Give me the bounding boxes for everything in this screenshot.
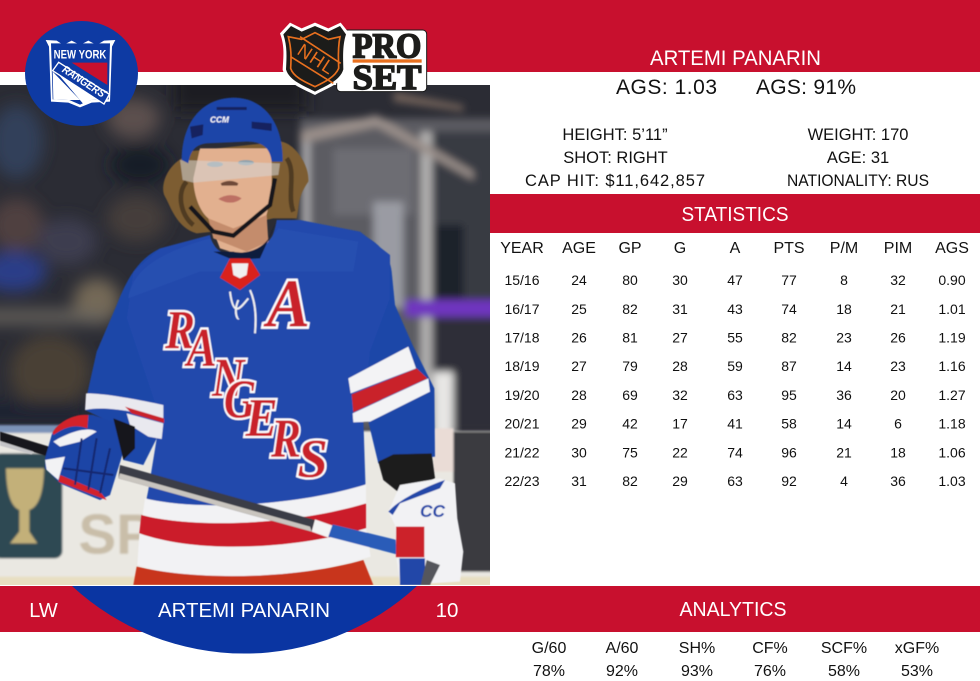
- top red banner: [0, 0, 980, 72]
- table rows: 58: [781, 416, 797, 432]
- pro set wordmark: PRO: [353, 26, 421, 65]
- table rows: 1.18: [938, 416, 966, 432]
- table rows: 42: [622, 416, 638, 432]
- ags summary: [616, 76, 856, 99]
- player bio details: NATIONALITY: RUS: [787, 172, 929, 190]
- table rows: 26: [571, 330, 587, 346]
- table header: P/M: [830, 240, 858, 257]
- table rows: 1.06: [938, 444, 966, 460]
- player bio details: [525, 126, 929, 190]
- pro set logo: [280, 23, 427, 97]
- table rows: 81: [622, 330, 638, 346]
- ice and boards: [0, 424, 490, 585]
- table rows: 24: [571, 272, 587, 288]
- jersey number: 10: [436, 599, 458, 622]
- table rows: 55: [727, 330, 743, 346]
- player bio details: AGE: 31: [827, 149, 889, 167]
- jersey torso: [127, 220, 390, 515]
- helmet: [182, 98, 283, 163]
- player bio details: SHOT: RIGHT: [563, 149, 668, 167]
- analytics table: G/60: [532, 640, 566, 657]
- team logo: [25, 21, 138, 126]
- visor and chin strap: [180, 160, 280, 183]
- sleeve stripes: [348, 347, 416, 393]
- table rows: 1.01: [938, 301, 966, 317]
- right sleeve: [333, 232, 435, 463]
- neck and face: [193, 148, 272, 257]
- table rows: 18/19: [504, 358, 540, 374]
- player figure: CCM: [210, 115, 230, 125]
- alternate captain letter: A: [263, 267, 310, 342]
- table rows: 19/20: [504, 387, 540, 403]
- jersey wordmark: N: [211, 347, 246, 408]
- player bio details: HEIGHT: 5’11”: [562, 126, 668, 144]
- table rows: 22/23: [504, 473, 540, 489]
- table rows: 59: [727, 358, 743, 374]
- table rows: 74: [727, 444, 743, 460]
- table rows: 79: [622, 358, 638, 374]
- ice and boards: SP: [78, 503, 154, 566]
- table header: G: [674, 240, 686, 257]
- table rows: 8: [840, 272, 848, 288]
- table rows: 18: [836, 301, 852, 317]
- table rows: 47: [727, 272, 743, 288]
- analytics table: 53%: [901, 663, 933, 680]
- rangers shield: [46, 40, 115, 107]
- table rows: 31: [672, 301, 688, 317]
- table rows: 1.03: [938, 473, 966, 489]
- logo plate: [337, 30, 427, 92]
- player photo: [0, 85, 490, 585]
- table header: PIM: [884, 240, 912, 257]
- table rows: 1.16: [938, 358, 966, 374]
- table rows: 20/21: [504, 416, 540, 432]
- analytics table: xGF%: [895, 640, 939, 657]
- table rows: 77: [781, 272, 797, 288]
- jersey wordmark: S: [297, 428, 328, 489]
- table rows: 96: [781, 444, 797, 460]
- table rows: 0.90: [938, 272, 966, 288]
- jersey wordmark: R: [270, 408, 301, 469]
- bottom red band: [0, 586, 980, 632]
- table rows: 15/16: [504, 272, 540, 288]
- left glove: [45, 415, 135, 500]
- table rows: 82: [781, 330, 797, 346]
- table header: PTS: [773, 240, 805, 257]
- table rows: 30: [571, 444, 587, 460]
- nhl shield: [280, 23, 349, 95]
- table rows: 32: [890, 272, 906, 288]
- table rows: 6: [894, 416, 902, 432]
- photo background: arena crowd and ice: [0, 85, 490, 585]
- table rows: 69: [622, 387, 638, 403]
- table rows: 92: [781, 473, 797, 489]
- jersey hem stripes: [143, 484, 366, 523]
- analytics heading: ANALYTICS: [680, 599, 786, 621]
- analytics table: SH%: [679, 640, 715, 657]
- table rows: 74: [781, 301, 797, 317]
- ags summary: AGS: 91%: [756, 76, 856, 99]
- table rows: 43: [727, 301, 743, 317]
- logo disc: [25, 21, 138, 126]
- table rows: 31: [571, 473, 587, 489]
- table rows: 75: [622, 444, 638, 460]
- right wrist guard: [378, 453, 435, 493]
- table rows: 27: [571, 358, 587, 374]
- table header: GP: [618, 240, 642, 257]
- right glove: CC: [420, 501, 446, 521]
- table rows: 17: [672, 416, 688, 432]
- table rows: 14: [836, 416, 852, 432]
- analytics table: 92%: [606, 663, 638, 680]
- table rows: 28: [672, 358, 688, 374]
- table rows: 21/22: [504, 444, 540, 460]
- collar badge: [220, 258, 260, 290]
- pants: [133, 560, 373, 585]
- table rows: 16/17: [504, 301, 540, 317]
- table rows: 4: [840, 473, 848, 489]
- analytics table: CF%: [752, 640, 788, 657]
- table rows: 29: [571, 416, 587, 432]
- pro set logo: SET: [353, 58, 422, 97]
- position: LW: [29, 600, 58, 622]
- hockey stick: [0, 432, 397, 554]
- left sleeve: [85, 248, 160, 466]
- table rows: 28: [571, 387, 587, 403]
- table rows: 82: [622, 301, 638, 317]
- analytics table: [532, 640, 939, 680]
- analytics table: SCF%: [821, 640, 867, 657]
- jersey wordmark: A: [184, 317, 217, 378]
- statistics heading: STATISTICS: [682, 203, 788, 226]
- ags summary: AGS: 1.03: [616, 76, 717, 99]
- analytics table: 78%: [533, 663, 565, 680]
- table rows: 21: [890, 301, 906, 317]
- table rows: 29: [672, 473, 688, 489]
- table rows: 17/18: [504, 330, 540, 346]
- table rows: 95: [781, 387, 797, 403]
- table rows: 32: [672, 387, 688, 403]
- analytics table: A/60: [606, 640, 639, 657]
- table rows: 30: [672, 272, 688, 288]
- table rows: 22: [672, 444, 688, 460]
- jersey wordmark: E: [245, 388, 278, 449]
- table rows: 14: [836, 358, 852, 374]
- player bio details: WEIGHT: 170: [808, 126, 908, 144]
- table header: AGE: [562, 240, 596, 257]
- table header: [500, 240, 969, 257]
- table rows: 1.27: [938, 387, 966, 403]
- blue name arc: [72, 586, 417, 654]
- table rows: 63: [727, 387, 743, 403]
- table rows: 1.19: [938, 330, 966, 346]
- table rows: 82: [622, 473, 638, 489]
- analytics table: 93%: [681, 663, 713, 680]
- table header: A: [730, 240, 741, 257]
- statistics table: [500, 240, 969, 489]
- table rows: 18: [890, 444, 906, 460]
- analytics table: 58%: [828, 663, 860, 680]
- table rows: 80: [622, 272, 638, 288]
- nhl shield: NHL: [294, 39, 338, 78]
- rangers shield: NEW YORK: [54, 47, 106, 61]
- table rows: 63: [727, 473, 743, 489]
- player name heading: ARTEMI PANARIN: [650, 47, 821, 70]
- shoulder yoke shade: [129, 236, 272, 298]
- player figure: [0, 98, 463, 585]
- table rows: 87: [781, 358, 797, 374]
- table rows: 25: [571, 301, 587, 317]
- jersey wordmark: [164, 299, 328, 489]
- rangers shield: RANGERS: [60, 64, 108, 101]
- player bio details: CAP HIT: $11,642,857: [525, 172, 705, 190]
- table rows: 26: [890, 330, 906, 346]
- table rows: 41: [727, 416, 743, 432]
- player name on arc: ARTEMI PANARIN: [158, 599, 330, 622]
- jersey wordmark: G: [224, 368, 256, 430]
- table rows: 36: [836, 387, 852, 403]
- table rows: [504, 272, 966, 489]
- table rows: 20: [890, 387, 906, 403]
- table rows: 27: [672, 330, 688, 346]
- analytics table: 76%: [754, 663, 786, 680]
- hair: [163, 142, 308, 233]
- table rows: 36: [890, 473, 906, 489]
- table header: AGS: [935, 240, 969, 257]
- table rows: 23: [836, 330, 852, 346]
- jersey wordmark: R: [164, 299, 195, 360]
- table header: YEAR: [500, 240, 544, 257]
- statistics band: [490, 194, 980, 233]
- table rows: 21: [836, 444, 852, 460]
- right glove: [388, 478, 463, 585]
- table rows: 23: [890, 358, 906, 374]
- laces: [230, 290, 256, 333]
